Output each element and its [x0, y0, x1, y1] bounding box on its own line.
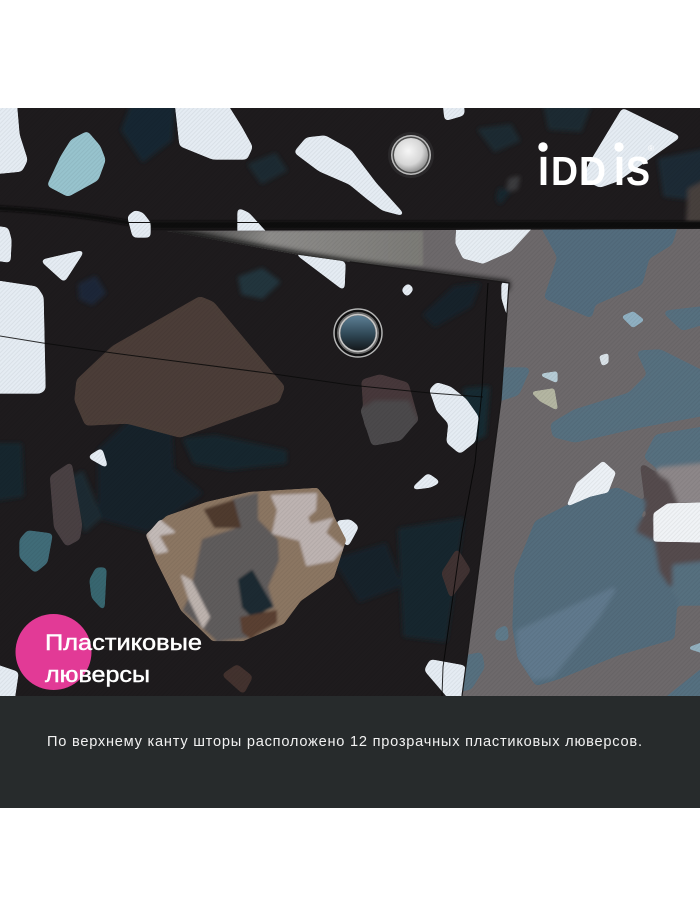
terrazzo: camouflage multi-colour piece — [147, 489, 345, 640]
heading: Пластиковые люверсы: люверсы — [45, 662, 150, 687]
twill fabric texture — [0, 108, 700, 696]
horizontal stitch line on flap — [0, 336, 483, 397]
terrazzo: grey and brown piece near the seam — [224, 376, 469, 692]
logo: IDDIS: I — [614, 148, 625, 194]
vertical stitch line on flap — [442, 283, 488, 696]
pink accent circle — [16, 614, 92, 690]
logo: IDDIS: D — [579, 148, 606, 194]
terrazzo: teal pieces — [21, 133, 105, 608]
shadow: flap edge on grey layer — [167, 233, 509, 286]
logo: IDDIS: I — [538, 148, 549, 194]
photo: shower curtain fabric — [0, 100, 700, 705]
icon: flap grommet — [333, 308, 383, 358]
caption text: По верхнему канту шторы расположено 12 прозрачных пластиковых люверсов. — [47, 734, 642, 750]
top hem seam — [0, 208, 700, 229]
curtain back layer: grey fabric — [160, 220, 700, 705]
heading: Пластиковые люверсы — [45, 630, 202, 687]
dark terrazzo patches — [0, 104, 700, 640]
heading: Пластиковые люверсы: Пластиковые — [45, 630, 202, 655]
seam stitch over white pieces — [128, 222, 258, 223]
flap edge line — [350, 262, 509, 696]
terrazzo: large brown piece — [77, 299, 282, 435]
back layer: blue and grey terrazzo — [455, 220, 700, 705]
upper hem and flap terrazzo: white pieces — [0, 100, 678, 702]
terrazzo: mauve piece — [52, 465, 80, 544]
logo: IDDIS: ® — [648, 144, 654, 153]
caption band — [0, 696, 700, 808]
logo: IDDIS: D — [551, 148, 578, 194]
icon: top grommet — [388, 132, 434, 178]
back layer: pale pieces — [457, 225, 700, 654]
logo: IDDIS: S — [626, 148, 650, 194]
logo: IDDIS — [538, 142, 654, 186]
